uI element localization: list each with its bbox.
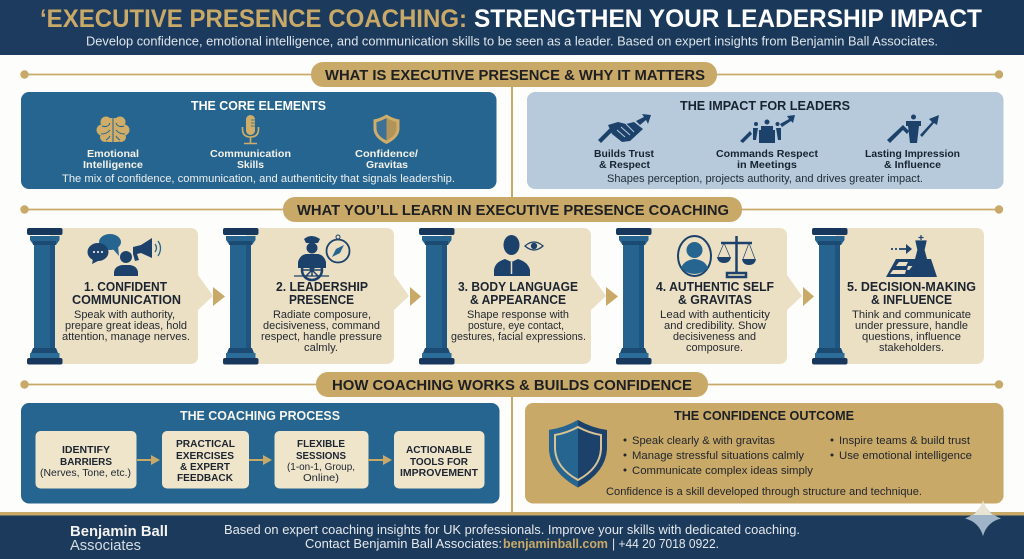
footer note bbox=[224, 522, 800, 551]
outcome list: Manage stressful situations calmly bbox=[632, 450, 804, 462]
pillar bbox=[223, 228, 258, 364]
outcome list: Communicate complex ideas simply bbox=[632, 465, 813, 477]
body text: gestures, facial expressions. bbox=[451, 331, 586, 343]
arrow bbox=[213, 287, 225, 306]
heading bbox=[458, 279, 578, 307]
body text: composure. bbox=[686, 342, 743, 354]
body text: stakeholders. bbox=[879, 342, 944, 354]
body text: calmly. bbox=[304, 342, 338, 354]
label: communication skills: Skills bbox=[237, 159, 264, 171]
caption: Confidence is a skill developed through structure and technique. bbox=[606, 486, 922, 498]
body text: Think and communicate bbox=[852, 309, 971, 321]
card 4: authentic self bbox=[616, 228, 814, 364]
title bbox=[40, 5, 982, 33]
label: commands respect: in Meetings bbox=[737, 159, 797, 171]
icon: sparkle bbox=[965, 500, 1001, 536]
icon: podium with arrow bbox=[887, 114, 939, 143]
step: actionable tools: IMPROVEMENT bbox=[400, 467, 479, 479]
footer note: Based on expert coaching insights for UK professionals. Improve your skills with dedicated coaching. bbox=[224, 522, 800, 537]
panel: the coaching process bbox=[21, 403, 500, 504]
section heading: what you'll learn bbox=[283, 197, 742, 222]
label: lasting impression: Lasting Impression bbox=[865, 148, 960, 160]
step: practical exercises bbox=[162, 431, 249, 488]
outcome list: Use emotional intelligence bbox=[839, 450, 972, 462]
body text: prepare great ideas, hold bbox=[65, 320, 187, 332]
icon: large shield bbox=[549, 420, 607, 488]
step: actionable tools: TOOLS FOR bbox=[410, 456, 468, 468]
label: builds trust bbox=[594, 148, 654, 171]
caption: Shapes perception, projects authority, and drives greater impact. bbox=[607, 173, 923, 185]
step: practical exercises: FEEDBACK bbox=[177, 472, 233, 484]
step: actionable tools: ACTIONABLE bbox=[406, 444, 472, 456]
section heading: how coaching works: HOW COACHING WORKS & BUILDS CONFIDENCE bbox=[332, 377, 692, 394]
step: practical exercises: & EXPERT bbox=[180, 461, 231, 473]
icon: speech and megaphone bbox=[88, 234, 160, 276]
arrow bbox=[410, 287, 421, 306]
section heading: what is executive presence: WHAT IS EXECUTIVE PRESENCE & WHY IT MATTERS bbox=[325, 67, 705, 84]
body text: under pressure, handle bbox=[855, 320, 968, 332]
heading: 3. BODY LANGUAGE bbox=[458, 279, 578, 294]
icon: meeting with arrow bbox=[740, 115, 795, 143]
step: flexible sessions bbox=[274, 431, 368, 488]
pillar bbox=[812, 228, 848, 364]
icon: shield bbox=[374, 114, 400, 144]
label: commands respect: Commands Respect bbox=[716, 148, 818, 160]
arrow bbox=[606, 287, 618, 306]
step: practical exercises: PRACTICAL bbox=[176, 438, 236, 450]
outcome list: Speak clearly & with gravitas bbox=[632, 435, 775, 447]
pillar bbox=[27, 228, 62, 364]
panel: the impact for leaders bbox=[527, 92, 1004, 189]
body text: decisiveness and bbox=[673, 331, 756, 343]
icon: microphone bbox=[242, 115, 258, 144]
panel: the core elements bbox=[21, 92, 496, 189]
body text: Lead with authenticity bbox=[660, 309, 771, 321]
heading: 4. AUTHENTIC SELF bbox=[656, 279, 774, 294]
heading: 5. DECISION-MAKING bbox=[847, 279, 976, 294]
logo text: Associates bbox=[70, 537, 141, 554]
arrow bbox=[803, 287, 814, 306]
heading: 2. LEADERSHIP bbox=[276, 279, 368, 294]
body text: and credibility. Show bbox=[664, 320, 766, 332]
pillar bbox=[616, 228, 652, 364]
label: lasting impression bbox=[865, 148, 960, 171]
step: actionable tools bbox=[394, 431, 484, 488]
icon: handshake with arrow bbox=[598, 114, 651, 143]
body text: respect, handle pressure bbox=[261, 331, 382, 343]
label: confidence gravitas: Confidence/ bbox=[355, 148, 418, 160]
label: communication skills bbox=[210, 148, 291, 171]
heading: & APPEARANCE bbox=[470, 292, 566, 307]
heading bbox=[847, 279, 976, 307]
footer bbox=[0, 500, 1024, 559]
body text bbox=[660, 309, 771, 354]
body text: Radiate composure, bbox=[273, 309, 371, 321]
step: flexible sessions: (1-on-1, Group, bbox=[287, 461, 355, 473]
title: STRENGTHEN YOUR LEADERSHIP IMPACT bbox=[474, 5, 982, 33]
heading: confidence outcome: THE CONFIDENCE OUTCOME bbox=[674, 408, 854, 423]
footer note: benjaminball.com bbox=[503, 536, 608, 551]
label: emotional intelligence: Emotional bbox=[87, 148, 139, 160]
icon: person and eye bbox=[494, 235, 543, 276]
body text: Shape response with bbox=[467, 309, 569, 321]
body text bbox=[451, 309, 586, 343]
card 3: body language bbox=[419, 228, 618, 364]
step: flexible sessions: Online) bbox=[303, 472, 339, 484]
heading bbox=[656, 279, 774, 307]
icon: portrait and scales bbox=[678, 236, 756, 277]
header banner bbox=[0, 0, 1024, 55]
body text: posture, eye contact, bbox=[468, 320, 564, 332]
arrow bbox=[368, 455, 392, 465]
section heading: how coaching works bbox=[316, 372, 708, 397]
icon: brain bbox=[96, 116, 130, 144]
caption: The mix of confidence, communication, and authenticity that signals leadership. bbox=[62, 173, 455, 185]
step: practical exercises: EXERCISES bbox=[176, 450, 234, 462]
heading: impact: THE IMPACT FOR LEADERS bbox=[680, 98, 850, 113]
heading: coaching process: THE COACHING PROCESS bbox=[180, 408, 340, 423]
body text bbox=[852, 309, 971, 354]
body text: decisiveness, command bbox=[263, 320, 380, 332]
label: confidence gravitas: Gravitas bbox=[366, 159, 408, 171]
icon: captain at wheel with compass bbox=[294, 235, 350, 280]
label: confidence gravitas bbox=[355, 148, 418, 171]
body text: attention, manage nerves. bbox=[62, 331, 190, 343]
subtitle: Develop confidence, emotional intelligence, and communication skills to be seen as a leader. Based on expert insights from Benjamin Ball Associates. bbox=[86, 34, 938, 48]
card 5: decision-making bbox=[812, 228, 984, 364]
card 1: confident communication bbox=[27, 228, 225, 364]
heading: & GRAVITAS bbox=[678, 292, 752, 307]
section heading: what you'll learn: WHAT YOU’LL LEARN IN EXECUTIVE PRESENCE COACHING bbox=[297, 202, 729, 219]
step: flexible sessions: FLEXIBLE bbox=[297, 438, 345, 450]
outcome list: Inspire teams & build trust bbox=[839, 435, 971, 447]
body text: questions, influence bbox=[862, 331, 961, 343]
heading: COMMUNICATION bbox=[72, 292, 181, 307]
label: emotional intelligence bbox=[83, 148, 143, 171]
icon: chess board and king bbox=[886, 235, 937, 277]
heading: & INFLUENCE bbox=[871, 292, 952, 307]
logo text bbox=[70, 523, 168, 554]
step: identify barriers: IDENTIFY bbox=[62, 444, 110, 456]
body text bbox=[261, 309, 382, 354]
step: identify barriers bbox=[36, 431, 136, 488]
step: identify barriers: BARRIERS bbox=[60, 456, 112, 468]
label: commands respect bbox=[716, 148, 818, 171]
heading: PRESENCE bbox=[289, 292, 354, 307]
card 2: leadership presence bbox=[223, 228, 421, 364]
body text bbox=[62, 309, 190, 343]
step: flexible sessions: SESSIONS bbox=[296, 450, 346, 462]
title: ‘EXECUTIVE PRESENCE COACHING: bbox=[40, 5, 467, 33]
step: identify barriers: (Nerves, Tone, etc.) bbox=[40, 467, 131, 479]
heading bbox=[72, 279, 181, 307]
arrow bbox=[249, 455, 272, 465]
label: builds trust: & Respect bbox=[599, 159, 650, 171]
section connectors bbox=[20, 70, 1003, 513]
outcome list bbox=[624, 435, 972, 477]
label: lasting impression: & Influence bbox=[884, 159, 941, 171]
heading: 1. CONFIDENT bbox=[84, 279, 167, 294]
footer note: Contact Benjamin Ball Associates: bbox=[305, 536, 502, 551]
panel: the confidence outcome bbox=[525, 403, 1004, 504]
heading bbox=[276, 279, 368, 307]
label: builds trust: Builds Trust bbox=[594, 148, 654, 160]
label: communication skills: Communication bbox=[210, 148, 291, 160]
heading: core elements: THE CORE ELEMENTS bbox=[191, 98, 326, 113]
body text: Speak with authority, bbox=[74, 309, 175, 321]
footer note: | +44 20 7018 0922. bbox=[612, 536, 719, 551]
pillar bbox=[419, 228, 454, 364]
label: emotional intelligence: Intelligence bbox=[83, 159, 143, 171]
logo text: Benjamin Ball bbox=[70, 523, 168, 540]
arrow bbox=[137, 455, 160, 465]
section heading: what is executive presence bbox=[311, 62, 717, 87]
